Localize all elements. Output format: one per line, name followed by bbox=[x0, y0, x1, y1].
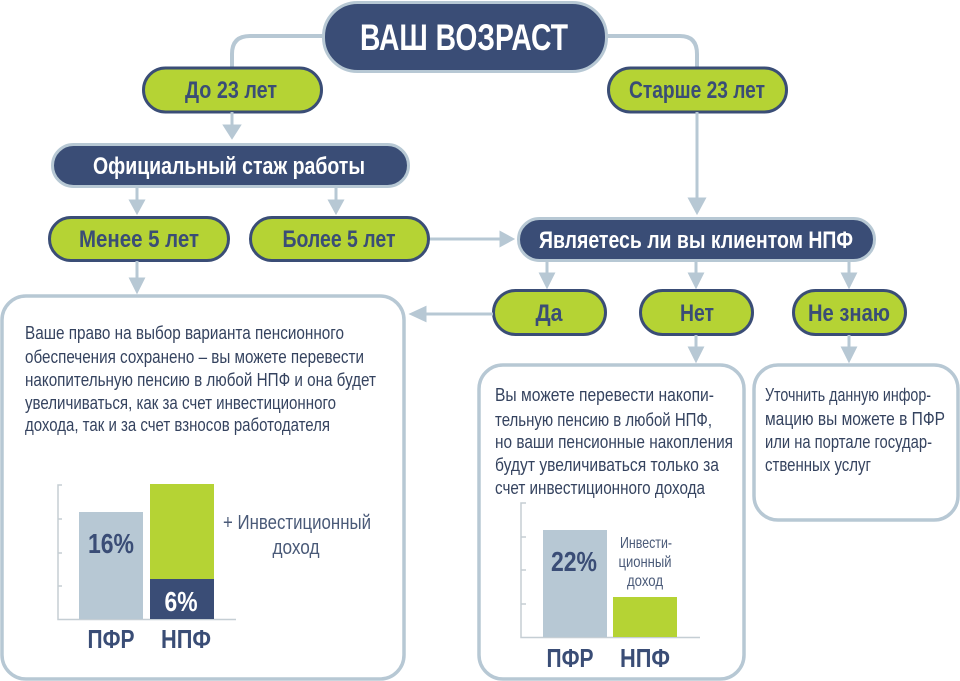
pill: Да: Да bbox=[536, 300, 563, 327]
text block: middle panel bbox=[495, 385, 733, 498]
arrow: Старше 23 лет to клиент НПФ bbox=[690, 112, 704, 212]
text block: middle panel: счет инвестиционного дохода bbox=[495, 478, 706, 498]
arrow: стаж to Менее 5 лет bbox=[131, 187, 143, 212]
pill: Являетесь ли вы клиентом НПФ: Являетесь ли вы клиентом НПФ bbox=[539, 227, 853, 254]
chart: middle bars: 22% bbox=[551, 546, 597, 577]
chart: left bars: НПФ bbox=[161, 624, 211, 654]
pill: Официальный стаж работы bbox=[52, 144, 408, 186]
arrow: клиент to Нет bbox=[690, 262, 702, 286]
pill: Нет bbox=[640, 290, 752, 334]
pill: Официальный стаж работы: Официальный стаж работы bbox=[93, 153, 365, 180]
chart: left bars: ПФР bbox=[88, 624, 134, 654]
pill: Более 5 лет bbox=[250, 218, 428, 260]
pill: Более 5 лет: Более 5 лет bbox=[282, 226, 396, 253]
text block: middle panel: Вы можете перевести накопи- bbox=[495, 385, 714, 405]
arrow: Более 5 лет to клиент НПФ bbox=[430, 233, 512, 245]
pill: Да bbox=[494, 290, 606, 334]
title pill: ВАШ ВОЗРАСТ bbox=[360, 17, 568, 58]
chart: middle bars: ционный bbox=[618, 554, 672, 571]
pill: Старше 23 лет bbox=[608, 68, 786, 112]
arrow: Нет to middle panel bbox=[690, 335, 702, 360]
chart: left bars: 16% bbox=[88, 528, 134, 559]
text block: right panel: ственных услуг bbox=[765, 455, 871, 475]
panel: right, не знаю bbox=[754, 365, 958, 520]
chart: left bars: доход bbox=[272, 537, 320, 559]
text block: left panel: увеличиваться, как за счет инвестиционного bbox=[25, 393, 336, 413]
pill: Являетесь ли вы клиентом НПФ bbox=[518, 218, 874, 260]
arrow: До 23 лет to стаж bbox=[225, 112, 239, 137]
text block: left panel: дохода, так и за счет взносов работодателя bbox=[25, 415, 330, 435]
pill: Старше 23 лет: Старше 23 лет bbox=[629, 77, 765, 104]
arrow: стаж to Более 5 лет bbox=[330, 187, 342, 212]
connector: top to Старше 23 лет bbox=[607, 36, 697, 68]
pill: Не знаю bbox=[794, 290, 906, 334]
text block: middle panel: будут увеличиваться только за bbox=[495, 455, 720, 475]
chart: left bars bbox=[58, 484, 371, 654]
pill: Менее 5 лет bbox=[50, 218, 228, 260]
arrow: клиент to Да bbox=[541, 262, 553, 286]
panel: left, менее 5 лет bbox=[2, 296, 404, 679]
text block: left panel: обеспечения сохранено – вы можете перевести bbox=[25, 347, 364, 367]
chart: middle bars bbox=[521, 503, 700, 673]
chart: middle bars: НПФ bbox=[620, 643, 670, 673]
panel: middle, нет bbox=[479, 365, 744, 679]
pill: Менее 5 лет: Менее 5 лет bbox=[79, 226, 199, 253]
arrow: Да to left panel bbox=[412, 308, 493, 320]
text block: left panel bbox=[25, 323, 376, 435]
text block: middle panel: тельную пенсию в любой НПФ, bbox=[495, 410, 712, 430]
pill: До 23 лет bbox=[144, 68, 322, 112]
chart: middle bars: Инвести- bbox=[620, 535, 672, 552]
text block: left panel: накопительную пенсию в любой НПФ и она будет bbox=[25, 370, 376, 390]
arrow: клиент to Не знаю bbox=[843, 262, 855, 286]
text block: left panel: Ваше право на выбор варианта пенсионного bbox=[25, 323, 344, 343]
chart: left bars: + Инвестиционный bbox=[223, 512, 371, 534]
pill: Не знаю: Не знаю bbox=[808, 300, 890, 327]
title pill bbox=[324, 2, 606, 72]
arrow: Менее 5 лет to panel bbox=[131, 261, 143, 291]
text block: right panel bbox=[765, 385, 945, 475]
chart: middle bars: ПФР bbox=[546, 643, 594, 673]
connector: top to До 23 лет bbox=[232, 36, 323, 68]
arrow: Не знаю to right panel bbox=[843, 335, 855, 360]
pill: До 23 лет: До 23 лет bbox=[185, 77, 277, 104]
text block: middle panel: но ваши пенсионные накопления bbox=[495, 432, 733, 452]
chart: middle bars: доход bbox=[627, 573, 664, 590]
pill: Нет: Нет bbox=[680, 300, 714, 327]
chart: left bars: 6% bbox=[164, 586, 198, 617]
